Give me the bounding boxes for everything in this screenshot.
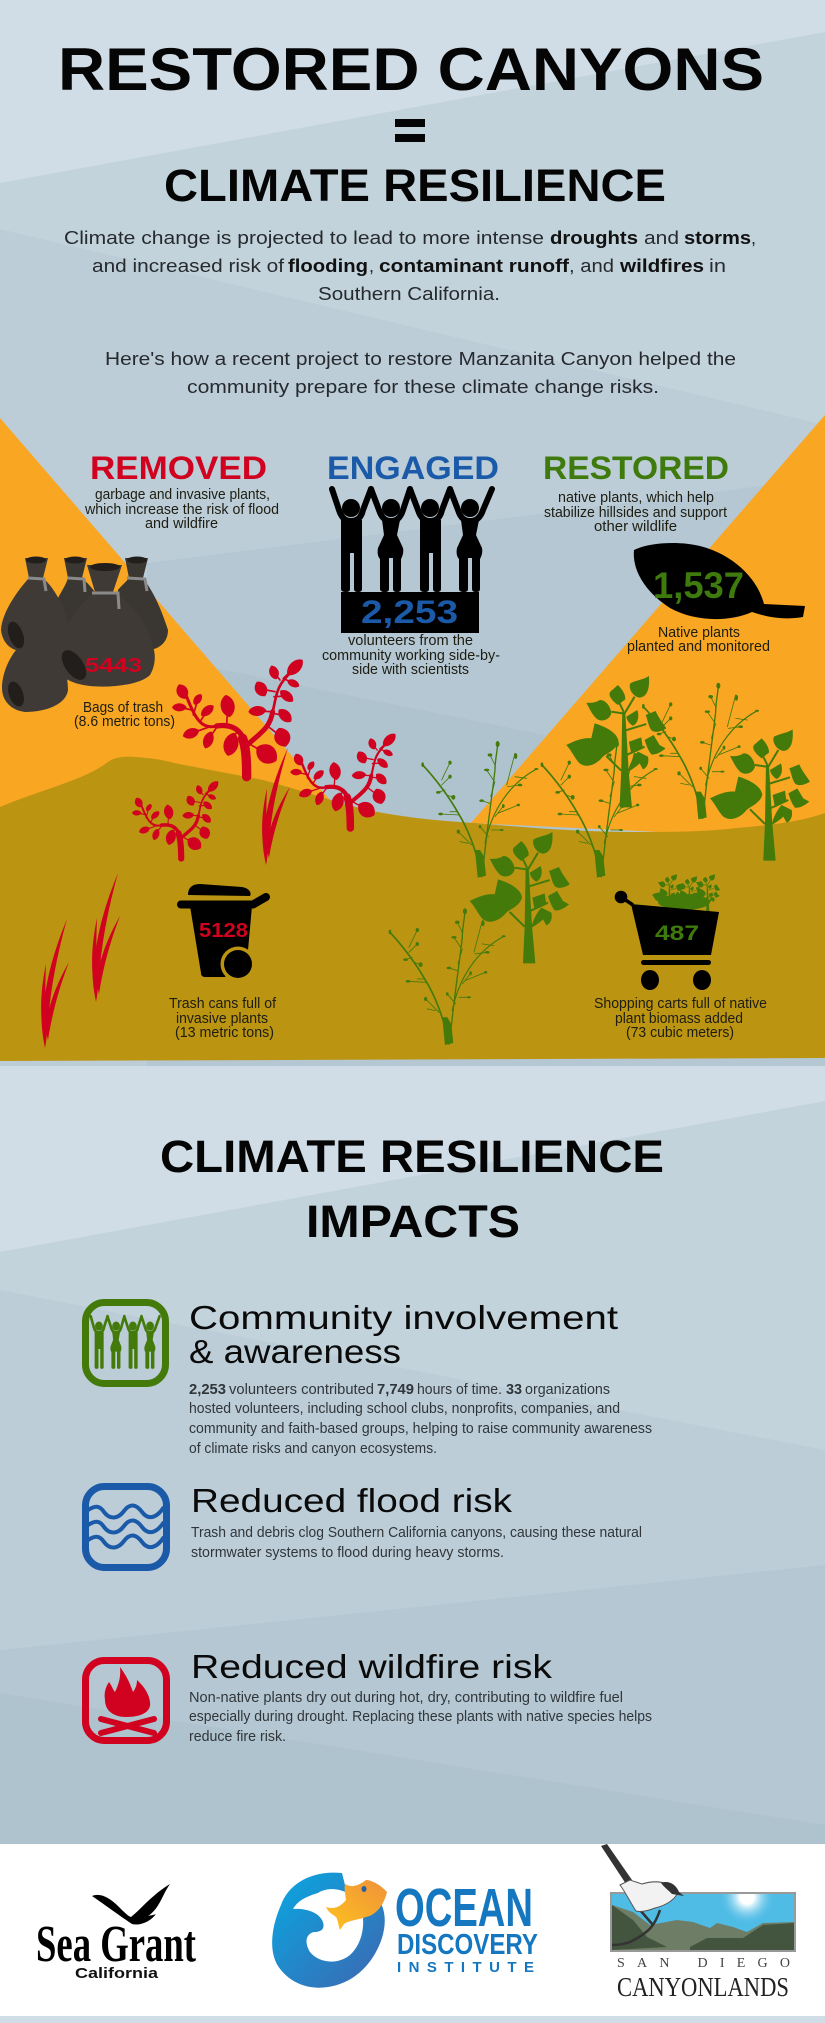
heading: removed xyxy=(84,450,279,532)
invasive plants (red) xyxy=(41,656,399,1048)
intro paragraph: Climate change is projected to lead to more intense xyxy=(64,228,544,248)
logo: Ocean Discovery Institute: DISCOVERY xyxy=(397,1929,538,1961)
heading: restored: other wildlife xyxy=(594,519,677,535)
title: RESTORED CANYONS xyxy=(58,36,764,103)
panel: community involvement: 33 xyxy=(506,1382,522,1398)
intro paragraph: Southern California. xyxy=(318,284,500,304)
intro paragraph: storms xyxy=(684,228,751,248)
icon: shopping cart with stat: 487 xyxy=(655,922,699,945)
panel: community involvement xyxy=(86,1299,652,1457)
panel: community involvement: volunteers contributed xyxy=(229,1382,374,1398)
intro paragraph: contaminant runoff xyxy=(379,256,570,276)
icon: trash bags with stat: 5443 xyxy=(85,655,142,677)
intro paragraph: in xyxy=(709,256,726,276)
intro paragraph: and increased risk of xyxy=(92,256,285,276)
panel: community involvement: of climate risks and canyon ecosystems. xyxy=(189,1441,437,1457)
panel: wildfire risk: especially during drought. Replacing these plants with native species helps xyxy=(189,1709,652,1725)
panel: community involvement: 2,253 xyxy=(189,1382,226,1398)
icon: trash can with stat: invasive plants xyxy=(176,1011,268,1027)
project paragraph xyxy=(105,349,736,397)
icon: trash can with stat: 5128 xyxy=(199,920,248,942)
icon: trash can with stat: (13 metric tons) xyxy=(175,1025,274,1041)
panel: community involvement: Community involvement xyxy=(189,1299,618,1336)
panel: flood risk: Reduced flood risk xyxy=(191,1482,513,1519)
intro paragraph: , xyxy=(751,228,756,248)
heading: climate resilience impacts: CLIMATE RESILIENCE xyxy=(160,1131,664,1182)
olive ground xyxy=(0,757,825,1061)
heading: removed: REMOVED xyxy=(90,450,267,486)
project paragraph: Here's how a recent project to restore Manzanita Canyon helped the xyxy=(105,349,736,369)
logo: Sea Grant California xyxy=(36,1884,196,1982)
icon: shopping cart with stat xyxy=(594,874,767,1041)
volunteers stat: community working side-by- xyxy=(322,648,500,664)
panel: community involvement: hours of time. xyxy=(417,1382,502,1398)
heading: restored: RESTORED xyxy=(543,450,729,486)
native plants (green) xyxy=(389,676,810,1045)
icon: waves xyxy=(86,1486,166,1568)
icon: leaf with stat: 1,537 xyxy=(653,565,744,606)
heading: restored xyxy=(543,450,729,535)
footer band xyxy=(0,1844,825,2023)
panel: community involvement: community and faith-based groups, helping to raise community awareness xyxy=(189,1421,652,1437)
panel: community involvement: hosted volunteers, including school clubs, nonprofits, companies, and xyxy=(189,1401,620,1417)
volunteers stat: 2,253 xyxy=(361,594,458,630)
logo: San Diego Canyonlands: CANYONLANDS xyxy=(617,1972,789,2002)
title xyxy=(58,36,764,211)
icon: trash can with stat: Trash cans full of xyxy=(169,996,277,1012)
panel: community involvement: & awareness xyxy=(189,1333,401,1370)
logo: Ocean Discovery Institute xyxy=(272,1873,538,1988)
panel: flood risk xyxy=(86,1482,642,1568)
icon: volunteers holding hands xyxy=(332,489,492,592)
icon: leaf with stat: Native plants xyxy=(658,625,740,641)
heading: engaged: ENGAGED xyxy=(327,450,499,486)
icon: leaf with stat xyxy=(627,543,805,655)
heading: removed: which increase the risk of flood xyxy=(84,502,279,518)
logo: Ocean Discovery Institute: INSTITUTE xyxy=(397,1959,534,1976)
logo: Ocean Discovery Institute: OCEAN xyxy=(395,1878,533,1938)
icon: trash bags with stat xyxy=(1,556,175,730)
logo: San Diego Canyonlands xyxy=(601,1844,795,2002)
intro paragraph: droughts xyxy=(550,228,638,248)
title: CLIMATE RESILIENCE xyxy=(164,160,666,211)
logo: Sea Grant California: California xyxy=(75,1965,159,1982)
heading: removed: and wildfire xyxy=(145,516,218,532)
icon: shopping cart with stat: Shopping carts full of native xyxy=(594,996,767,1012)
orange hillsides xyxy=(0,415,825,840)
logo: San Diego Canyonlands: SAN DIEGO xyxy=(617,1956,790,1971)
panel: wildfire risk xyxy=(86,1648,652,1745)
panel: community involvement: organizations xyxy=(525,1382,610,1398)
background: upper section xyxy=(0,0,825,1070)
icon: community xyxy=(86,1302,166,1384)
heading: restored: stabilize hillsides and support xyxy=(544,505,727,521)
background: lower section xyxy=(0,1066,825,1846)
icon: trash bags with stat: Bags of trash xyxy=(83,700,163,716)
panel: wildfire risk: Reduced wildfire risk xyxy=(191,1648,553,1685)
intro paragraph: and xyxy=(644,228,679,248)
intro paragraph: , and xyxy=(569,256,614,276)
intro paragraph xyxy=(64,228,756,304)
icon: shopping cart with stat: plant biomass added xyxy=(615,1011,743,1027)
panel: flood risk: stormwater systems to flood during heavy storms. xyxy=(191,1545,504,1561)
icon: leaf with stat: planted and monitored xyxy=(627,639,770,655)
icon: trash bags with stat: (8.6 metric tons) xyxy=(74,714,175,730)
intro paragraph: flooding xyxy=(288,256,368,276)
intro paragraph: wildfires xyxy=(619,256,704,276)
panel: wildfire risk: reduce fire risk. xyxy=(189,1729,286,1745)
panel: community involvement: 7,749 xyxy=(377,1382,414,1398)
heading: climate resilience impacts: IMPACTS xyxy=(306,1196,520,1247)
icon: shopping cart with stat: (73 cubic meters) xyxy=(626,1025,734,1041)
logo: Sea Grant California: Sea Grant xyxy=(36,1916,196,1973)
heading: restored: native plants, which help xyxy=(558,490,714,506)
panel: flood risk: Trash and debris clog Southern California canyons, causing these natural xyxy=(191,1525,642,1541)
heading: removed: garbage and invasive plants, xyxy=(95,487,270,503)
project paragraph: community prepare for these climate change risks. xyxy=(187,377,659,397)
panel: wildfire risk: Non-native plants dry out during hot, dry, contributing to wildfire fuel xyxy=(189,1690,623,1706)
volunteers stat xyxy=(322,592,500,678)
heading: climate resilience impacts xyxy=(160,1131,664,1247)
intro paragraph: , xyxy=(369,256,374,276)
icon: trash can with stat xyxy=(169,884,277,1041)
volunteers stat: side with scientists xyxy=(352,662,469,678)
icon: campfire xyxy=(86,1660,166,1740)
volunteers stat: volunteers from the xyxy=(348,633,473,649)
